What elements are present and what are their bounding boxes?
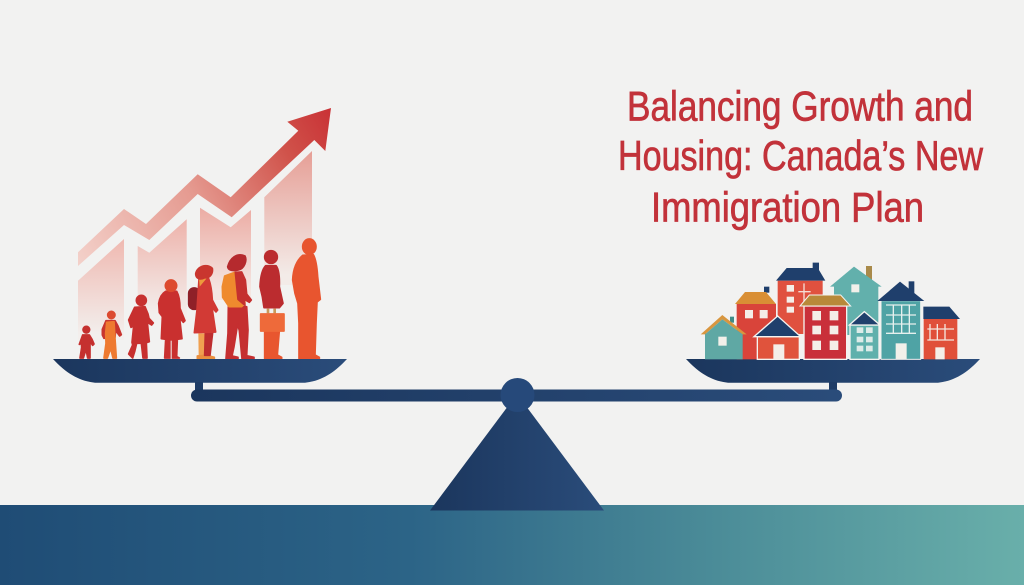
house: tall red back xyxy=(776,263,825,334)
houses xyxy=(701,263,960,359)
house: teal back xyxy=(830,266,882,335)
title xyxy=(618,82,984,230)
house: front navy roof xyxy=(754,316,801,359)
bottom band xyxy=(0,505,1024,585)
person 4: girl in dress xyxy=(159,280,185,359)
house: red apartment xyxy=(800,295,851,359)
person 7: man with briefcase xyxy=(260,251,284,359)
house: small teal xyxy=(701,315,747,359)
title: Immigration Plan xyxy=(651,184,924,230)
house: red with orange roof xyxy=(735,287,776,359)
rising arrow xyxy=(78,108,331,266)
person 1: small child xyxy=(79,326,94,358)
scale base xyxy=(430,394,604,510)
right pan stem xyxy=(829,382,837,392)
growth chart xyxy=(78,108,331,340)
person 8: tall man xyxy=(293,239,320,359)
right scale pan xyxy=(686,359,980,383)
scale beam xyxy=(191,390,842,402)
person 5: woman with dark backpack xyxy=(189,266,218,359)
person 6: woman with orange backpack xyxy=(222,255,254,359)
chart bars xyxy=(78,151,312,340)
scale pivot xyxy=(500,378,534,412)
person 2: child with backpack xyxy=(102,311,121,358)
person 3: child in dress xyxy=(129,295,153,358)
house: small teal navy roof xyxy=(849,312,880,359)
house: teal with grid window xyxy=(877,281,924,359)
people queue xyxy=(79,239,320,359)
house: red right xyxy=(923,307,960,359)
left scale pan xyxy=(53,359,347,383)
left pan stem xyxy=(195,382,203,392)
